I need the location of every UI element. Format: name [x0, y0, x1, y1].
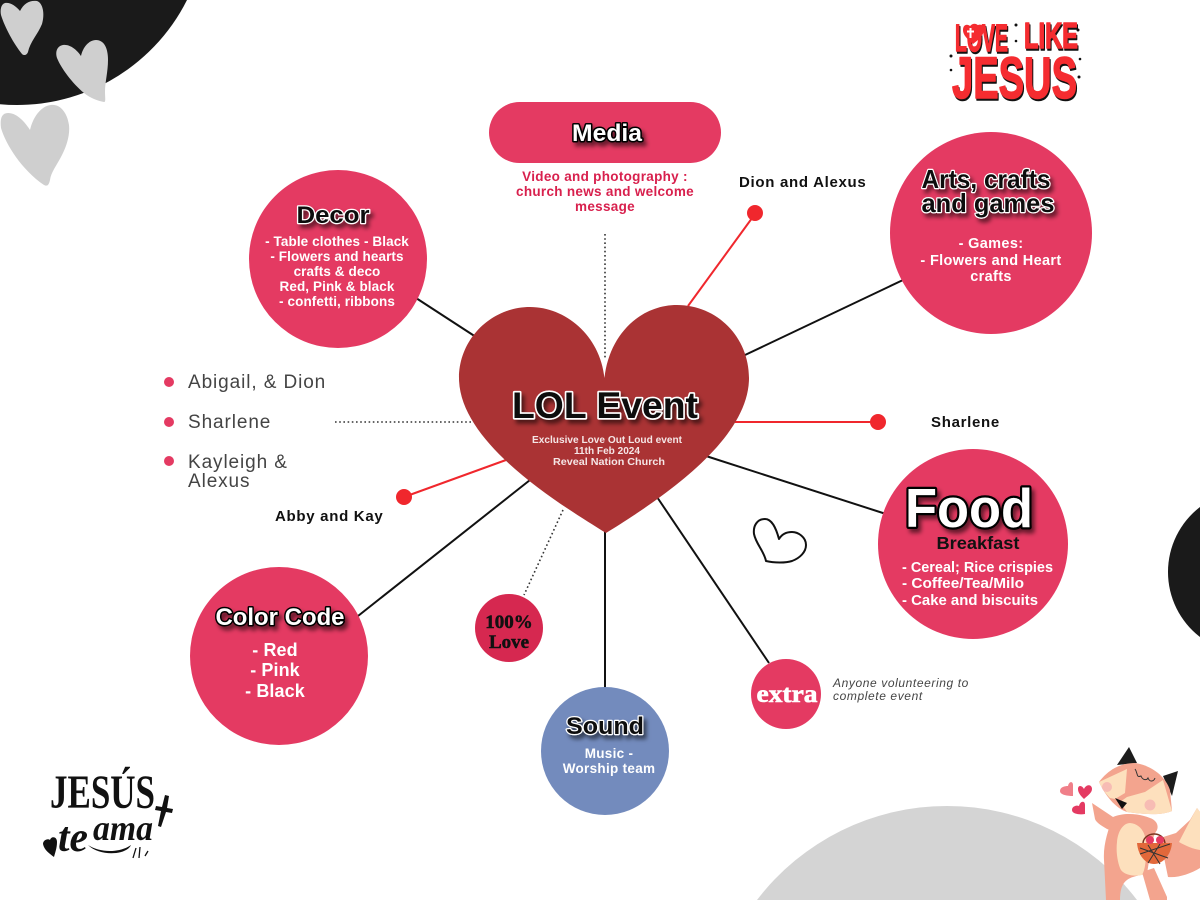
fox face cream — [1099, 769, 1127, 799]
basket — [1137, 843, 1172, 864]
panel: arts, crafts and games: - Games: — [959, 236, 1023, 252]
panel: food: - Cake and biscuits — [902, 593, 1038, 609]
logo: Love Like Jesus — [950, 15, 1081, 111]
icon: red node left — [396, 489, 412, 505]
logo: Love Like Jesus: LOVE — [955, 18, 1008, 60]
illustration: fox with basket — [1060, 747, 1200, 900]
panel: decor — [249, 170, 427, 348]
logo: Jesus te ama: ama — [93, 808, 153, 848]
panel: arts, crafts and games: crafts — [970, 269, 1012, 285]
list: team names: Abigail, & Dion — [188, 372, 326, 393]
label: Sharlene: Sharlene — [931, 414, 1000, 431]
icon: grey hearts top left — [1, 1, 108, 186]
text: media details — [516, 169, 694, 214]
text: event details — [532, 435, 683, 468]
panel: 100% love — [475, 594, 543, 662]
fox nose — [1115, 798, 1127, 809]
panel: color code: - Black — [245, 681, 306, 701]
panel: color code: - Pink — [250, 660, 301, 680]
panel: food: Food — [905, 477, 1033, 539]
panel: sound: Worship team — [563, 761, 655, 776]
text: media details: message — [575, 199, 635, 214]
text: extra note — [832, 676, 969, 703]
icon: logo stars — [950, 24, 1081, 78]
label: Dion and Alexus: Dion and Alexus — [739, 174, 866, 191]
panel: food: - Cereal; Rice crispies — [902, 560, 1053, 576]
hearts around fox — [1060, 782, 1073, 796]
background: black circle right edge — [1168, 507, 1200, 637]
panel: color code — [190, 567, 368, 745]
text: event details: 11th Feb 2024 — [574, 446, 640, 457]
fox curl — [1135, 769, 1155, 781]
logo: Jesus te ama — [43, 765, 173, 861]
text: media details: Video and photography : — [522, 169, 688, 184]
list: team names: Sharlene — [188, 412, 271, 433]
logo: Love Like Jesus: LIKE — [1024, 15, 1078, 56]
panel: decor: Red, Pink & black — [280, 279, 395, 294]
text: event details: Reveal Nation Church — [553, 457, 665, 468]
panel: 100% love: 100% — [485, 612, 533, 633]
text: event details: Exclusive Love Out Loud event — [532, 435, 683, 446]
connector lines — [335, 214, 903, 690]
fox cheeks — [1102, 782, 1112, 792]
list: team names: Alexus — [188, 471, 250, 492]
panel: extra — [751, 659, 821, 729]
fox ears — [1117, 747, 1137, 765]
panel: arts, crafts and games: - Flowers and Heart — [920, 253, 1062, 269]
panel: decor: - Table clothes - Black — [265, 234, 409, 249]
panel: 100% love: Love — [489, 632, 529, 653]
icon: red node top — [747, 205, 763, 221]
background: black circle top left — [0, 0, 187, 105]
fox body — [1104, 814, 1158, 900]
panel: decor: - Flowers and hearts — [270, 249, 404, 264]
heading: LOL Event: LOL Event — [512, 385, 698, 426]
text: extra note: complete event — [833, 689, 923, 703]
list: team names: Kayleigh & — [188, 452, 288, 473]
icon: logo heart with cross — [963, 25, 984, 44]
panel: arts, crafts and games — [890, 132, 1092, 334]
panel: color code: Color Code — [216, 604, 344, 631]
text: media details: church news and welcome — [516, 184, 694, 199]
text: extra note: Anyone volunteering to — [832, 676, 969, 690]
logo: Jesus te ama: te — [58, 815, 88, 861]
panel: decor: Decor — [296, 202, 370, 229]
panel: sound — [541, 687, 669, 815]
panel: food: Breakfast — [936, 533, 1020, 553]
panel: media — [489, 102, 721, 214]
panel: food — [878, 449, 1068, 639]
fox arm — [1092, 803, 1115, 832]
panel: central heart — [459, 305, 749, 533]
panel: sound: Sound — [566, 713, 644, 740]
icon: outline heart — [754, 519, 806, 562]
label: Abby and Kay: Abby and Kay — [275, 508, 383, 525]
panel: color code: - Red — [252, 640, 298, 660]
panel: media: Media — [572, 120, 643, 147]
logo: Love Like Jesus: JESUS — [952, 46, 1077, 111]
panel: decor: - confetti, ribbons — [279, 294, 395, 309]
icon: red node right — [870, 414, 886, 430]
panel: arts, crafts and games: and games — [922, 188, 1054, 218]
panel: decor: crafts & deco — [294, 264, 380, 279]
fox tail — [1160, 808, 1200, 877]
panel: sound: Music - — [585, 746, 633, 761]
fox head — [1099, 763, 1172, 814]
background: grey circle bottom right — [757, 806, 1137, 900]
panel: extra: extra — [756, 681, 818, 708]
list: team names — [164, 372, 326, 492]
fox belly — [1117, 823, 1146, 876]
panel: food: - Coffee/Tea/Milo — [902, 576, 1024, 592]
logo: Jesus te ama: JESÚS — [50, 765, 155, 819]
fox back leg — [1142, 868, 1167, 900]
panel: arts, crafts and games: Arts, crafts — [922, 164, 1050, 194]
